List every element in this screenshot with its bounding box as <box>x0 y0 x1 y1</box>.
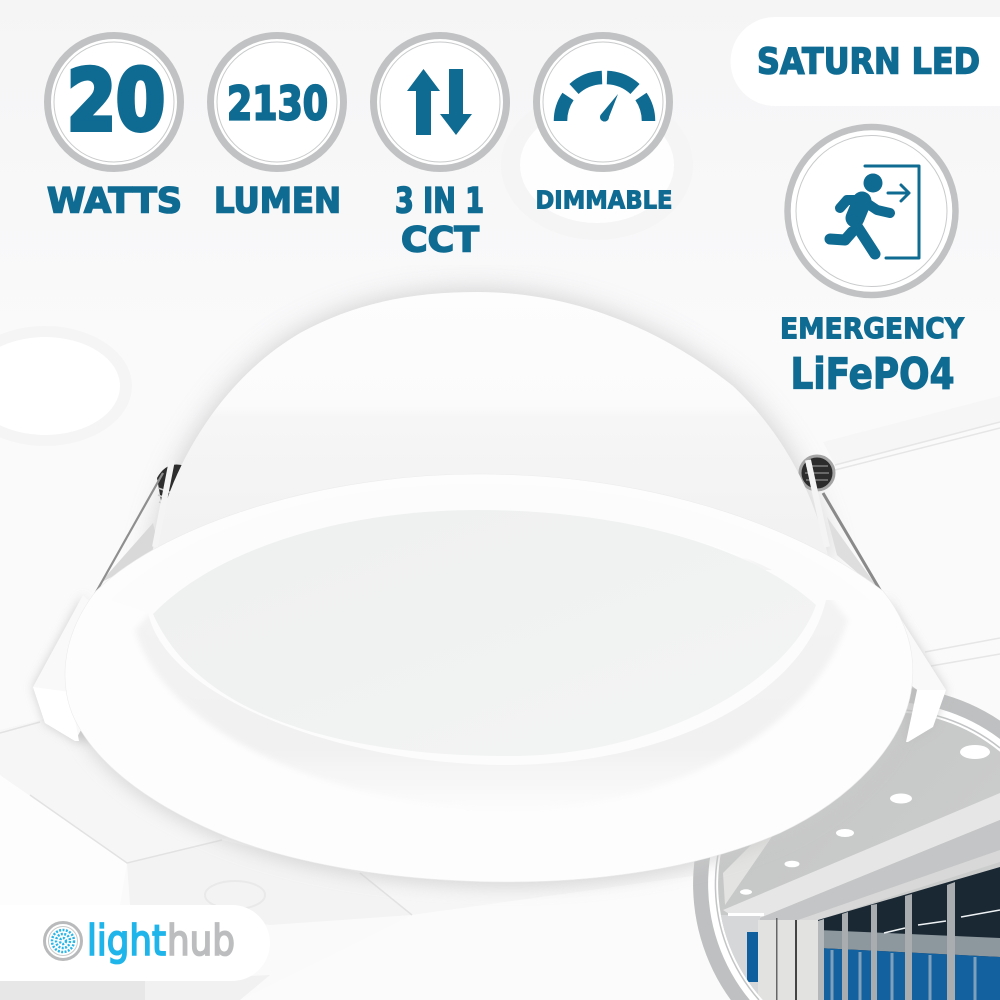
flange shadow <box>75 606 912 888</box>
label: 3 in 1 CCT: CCT <box>401 220 479 260</box>
logo pill: lighthub: hub <box>167 916 235 965</box>
label: emergency: EMERGENCY <box>780 312 964 346</box>
reflector cone <box>135 560 848 810</box>
panel: lumen badge <box>210 36 344 168</box>
panel: dimmable badge <box>536 36 670 168</box>
right spring clip <box>800 456 883 595</box>
LED downlight product <box>33 292 946 888</box>
label: watts: WATTS <box>47 182 182 222</box>
icon: dimmer gauge <box>560 78 649 122</box>
inner white rim <box>148 570 826 765</box>
number: 2130: 2130 <box>227 76 328 130</box>
label: dimmable: DIMMABLE <box>536 186 672 214</box>
label: lumen: LUMEN <box>214 182 341 222</box>
wordmark: light <box>87 916 166 965</box>
icon: running man exit <box>830 166 919 258</box>
ceiling light left <box>0 326 132 446</box>
logo pill: lighthub <box>0 905 270 981</box>
title pill: Saturn LED <box>731 17 1000 106</box>
tab shadows <box>33 595 946 742</box>
left spring clip <box>95 464 185 594</box>
photo inset: building interior <box>693 680 1000 1000</box>
label: LiFePO4: LiFePO4 <box>790 350 954 400</box>
panel: emergency badge <box>788 127 956 295</box>
panel: CCT badge <box>374 36 506 168</box>
flange <box>65 474 913 882</box>
dome shadow <box>150 292 830 560</box>
panel: wattage badge <box>48 36 180 168</box>
ceiling light top <box>501 90 693 240</box>
icon: up and down arrows <box>407 69 472 135</box>
spring retaining strips <box>155 460 827 547</box>
number: 20: 20 <box>67 52 165 150</box>
diffuser <box>153 510 816 756</box>
left tab <box>33 595 130 741</box>
right tab <box>850 597 946 742</box>
dome body <box>150 292 830 565</box>
icon: logo mark <box>44 922 82 960</box>
label: 3 in 1 CCT <box>395 182 484 260</box>
label: 3 in 1 CCT: 3 IN 1 <box>395 182 484 222</box>
flange top band <box>110 484 870 614</box>
